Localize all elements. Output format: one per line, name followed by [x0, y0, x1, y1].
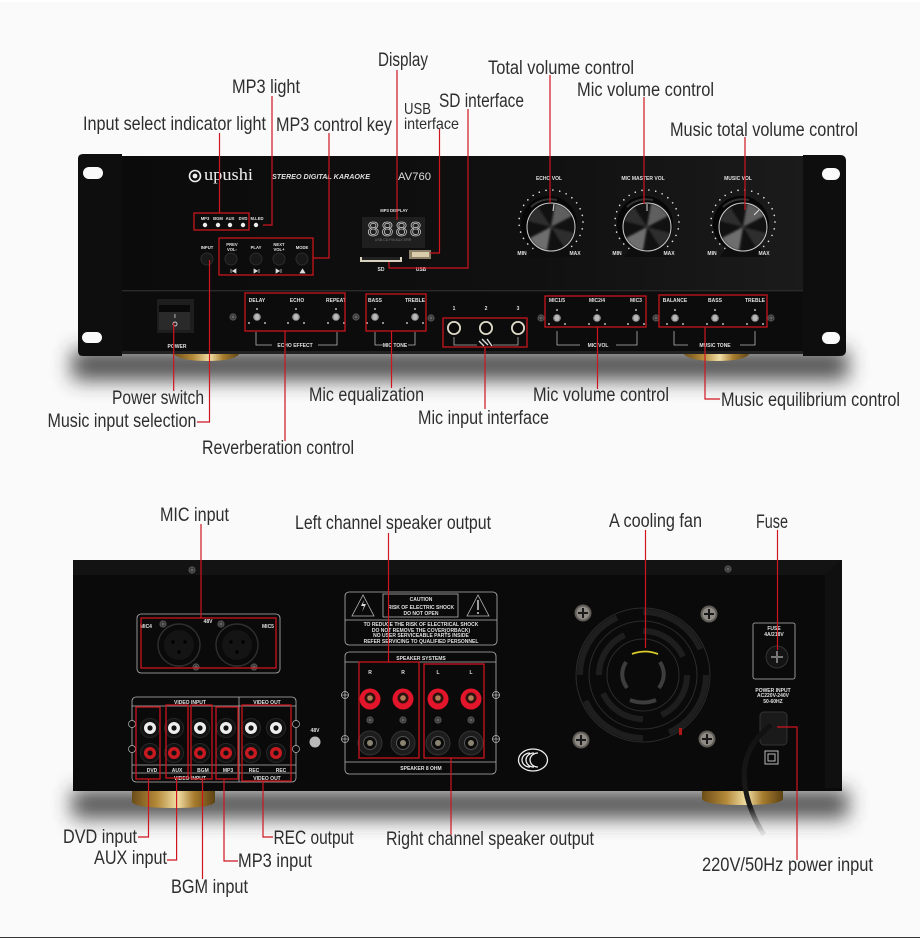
MP3 display: MP3 DISPLAY [380, 208, 408, 213]
video and audio connectors: VIDEO INPUT [174, 700, 206, 706]
input indicator box [194, 213, 249, 230]
mic jacks: 2 [485, 306, 488, 312]
USB port [409, 250, 431, 273]
mic input rear box [141, 618, 276, 668]
rear panel labels [63, 505, 874, 898]
mic tone controls: MIC TONE [383, 343, 408, 349]
48V button [310, 728, 320, 748]
mic volume controls: MIC VOL [588, 343, 608, 349]
label: right channel: Right channel speaker output [386, 829, 595, 850]
label: REC output: REC output [274, 828, 354, 849]
video and audio connectors: DVD [147, 768, 158, 774]
mic tone box [366, 294, 426, 331]
product tagline: STEREO DIGITAL KARAOKE [272, 174, 370, 181]
mic volume controls: MIC3 [630, 298, 642, 304]
MP3 control buttons: INPUT [201, 245, 214, 250]
MP3 control buttons [201, 242, 308, 273]
MP3 control buttons: NEXT [273, 242, 285, 247]
label: USB interface: interface [404, 116, 459, 133]
speaker terminals [341, 652, 500, 774]
SD slot: SD [378, 267, 385, 273]
brand logo: upushi [204, 165, 253, 184]
label: fuse: Fuse [756, 512, 788, 533]
mic master volume knob [612, 176, 679, 257]
video and audio connectors: VIDEO OUT [253, 700, 281, 706]
video and audio connectors: VIDEO OUT [253, 776, 281, 782]
label: mic equalization: Mic equalization [309, 385, 424, 406]
mic input plate: MIC5 [262, 624, 274, 630]
label: mic volume lower: Mic volume control [533, 385, 669, 406]
USB port: USB [416, 267, 427, 273]
label: power input: 220V/50Hz power input [702, 855, 874, 876]
input indicator LEDs: MP3 [201, 216, 210, 221]
label: mic volume top: Mic volume control [577, 80, 714, 101]
music tone controls: BALANCE [663, 298, 688, 304]
rear left gold foot [132, 790, 215, 808]
cooling fan grille [572, 604, 718, 748]
mic volume controls: MIC1/5 [549, 298, 565, 304]
front shadow [72, 350, 848, 380]
video and audio connectors: MP3 [223, 768, 233, 774]
label: MP3 control key: MP3 control key [276, 115, 392, 136]
label: SD interface: SD interface [439, 91, 524, 112]
power input label: AC220V-240V [757, 693, 790, 699]
video and audio connectors [128, 697, 300, 782]
fuse holder [753, 623, 795, 679]
music volume knob: MAX [758, 251, 770, 257]
music volume knob: MIN [707, 251, 717, 257]
label: display: Display [378, 50, 428, 71]
speaker terminals: SPEAKER SYSTEMS [396, 656, 446, 662]
right speaker box [359, 662, 419, 758]
front amplifier panel [72, 154, 848, 380]
mic jacks [447, 306, 525, 346]
rear right gold foot [702, 788, 783, 805]
label: left channel: Left channel speaker output [295, 513, 492, 534]
echo effect controls: ECHO EFFECT [277, 343, 313, 349]
caution label: DO NOT OPEN [403, 611, 439, 617]
caution label: DO NOT REMOVE THE COVER(ORBACK) [372, 628, 470, 634]
mic input plate: 48V [204, 619, 213, 625]
echo effect controls [248, 298, 346, 349]
label: power switch: Power switch [112, 388, 204, 409]
mic master volume knob: MAX [663, 251, 675, 257]
caution label: TO REDUCE THE RISK OF ELECTRICAL SHOCK [364, 622, 479, 628]
left gold foot [173, 353, 240, 361]
music tone controls: BASS [708, 298, 723, 304]
echo effect controls: ECHO [290, 298, 304, 304]
mic master volume knob: MIC MASTER VOL [621, 176, 665, 182]
caution label: CAUTION [410, 597, 433, 603]
DVD box [136, 707, 160, 779]
power input label: POWER INPUT [755, 688, 791, 694]
echo volume knob: MIN [517, 251, 527, 257]
video and audio connectors: BGM [197, 768, 209, 774]
speaker terminals: L [469, 670, 473, 676]
BGM box [191, 705, 212, 779]
red callout boxes and leader lines [136, 70, 797, 879]
48V button: 48V [311, 728, 320, 734]
input indicator LEDs: M.LED [250, 216, 264, 221]
speaker terminals: L [436, 670, 440, 676]
label: music input selection: Music input selection [48, 411, 196, 432]
speaker terminals: R [401, 670, 405, 676]
rear shadow [72, 790, 848, 818]
mic tone controls: BASS [368, 298, 383, 304]
mic input plate: MIC4 [140, 624, 152, 630]
front chassis [122, 156, 804, 353]
input indicator LEDs: DVD [239, 216, 247, 221]
echo effect box [245, 293, 345, 331]
label: AUX input: AUX input [94, 848, 168, 869]
label: BGM input: BGM input [171, 877, 249, 898]
mic tone controls [366, 298, 426, 349]
MP3 display: USB CD FM AUX ERR [375, 238, 412, 242]
SD slot [360, 257, 402, 273]
fuse holder: 4A/218V [764, 632, 784, 638]
input indicator LEDs: AUX [226, 216, 235, 221]
AUX box [166, 705, 188, 778]
video and audio connectors: REC [276, 768, 287, 774]
label: USB interface: USB [404, 101, 431, 118]
CCC certification mark [518, 749, 548, 771]
caution label: RISK OF ELECTRIC SHOCK [388, 605, 454, 611]
input indicator LEDs: BGM [213, 216, 223, 221]
label: total volume: Total volume control [488, 58, 634, 79]
label: mic input interface: Mic input interface [418, 408, 549, 429]
MP3 control buttons: VOL- [227, 247, 238, 252]
MP3 control buttons: VOL+ [273, 247, 285, 252]
mic volume controls [548, 298, 645, 349]
fuse holder: FUSE [767, 626, 781, 632]
power switch [157, 299, 194, 350]
caution label: REFER SERVICING TO QUALIFIED PERSONNEL [364, 639, 478, 645]
label: input select indicator: Input select indicator light [83, 114, 267, 135]
label: MP3 light: MP3 light [232, 77, 301, 98]
label: MIC input: MIC input [160, 505, 230, 526]
echo volume knob [517, 176, 583, 257]
echo effect controls: DELAY [249, 298, 266, 304]
power socket and cable [744, 712, 787, 835]
video and audio connectors: REC [249, 768, 260, 774]
rear leader lines [138, 524, 797, 879]
mic tone controls: TREBLE [405, 298, 426, 304]
caution label: NO USER SERVICEABLE PARTS INSIDE [373, 633, 469, 639]
video and audio connectors: AUX [172, 768, 183, 774]
right gold foot [683, 353, 750, 361]
MP3 box [216, 707, 238, 779]
label: cooling fan: A cooling fan [609, 511, 702, 532]
left rack ear [78, 154, 122, 356]
MP3 control buttons: PLAY [251, 245, 262, 250]
power switch: I [174, 314, 176, 320]
MP3 control box [219, 238, 313, 275]
mic volume box [545, 296, 646, 327]
REC box [242, 705, 291, 781]
label: USB interface [404, 101, 459, 133]
mic jacks: 3 [517, 306, 520, 312]
label: reverberation: Reverberation control [202, 438, 354, 459]
video and audio connectors: VIDEO INPUT [174, 776, 206, 782]
front panel labels [48, 50, 900, 459]
caution label [345, 592, 497, 645]
power input label [755, 688, 791, 705]
echo effect controls: REPEAT [326, 298, 346, 304]
mic input plate [137, 614, 280, 673]
model number: AV760 [398, 171, 431, 183]
echo volume knob: ECHO VOL [536, 176, 562, 182]
power switch: POWER [168, 344, 187, 350]
rear amplifier panel [72, 560, 848, 835]
music tone controls [663, 298, 766, 349]
MP3 display [362, 208, 425, 248]
mic volume controls: MIC2/4 [589, 298, 605, 304]
right rack ear [803, 155, 846, 356]
MP3 display: 8888 [367, 220, 422, 243]
front leader lines [174, 70, 745, 441]
left speaker box [424, 664, 484, 758]
mic jacks: 1 [453, 306, 456, 312]
MP3 control buttons: MODE [296, 245, 308, 250]
speaker terminals: R [368, 670, 372, 676]
echo volume knob: MAX [569, 251, 581, 257]
mic master volume knob: MIN [612, 251, 622, 257]
input indicator LEDs [201, 216, 264, 227]
music tone controls: TREBLE [745, 298, 766, 304]
speaker terminals: SPEAKER 8 OHM [400, 766, 442, 772]
label: music total volume: Music total volume control [670, 120, 858, 141]
music volume knob: MUSIC VOL [724, 176, 752, 182]
music tone box [659, 295, 767, 327]
label: MP3 input: MP3 input [238, 851, 313, 872]
rear chassis [73, 560, 842, 791]
music volume knob [707, 176, 775, 257]
MP3 control buttons: PREV [226, 242, 238, 247]
label: DVD input: DVD input [63, 827, 138, 848]
power input label: 50-60HZ [763, 699, 783, 705]
mic input box [443, 318, 527, 347]
music tone controls: MUSIC TONE [699, 343, 731, 349]
